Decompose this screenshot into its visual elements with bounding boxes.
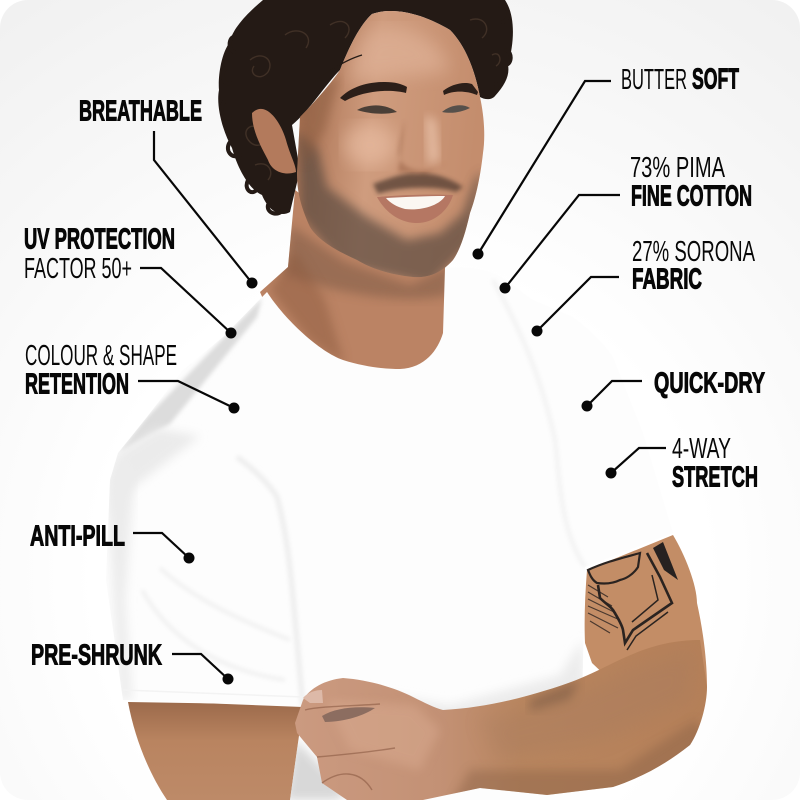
label: sorona fabric (532, 236, 755, 336)
label: uv protection (24, 224, 236, 338)
cheek highlight (344, 123, 396, 167)
marker dot (184, 552, 194, 564)
text: 4-way: 4-WAY (672, 433, 731, 465)
right armhole seam (493, 280, 585, 567)
tattoo: black triangle (653, 542, 678, 580)
hair curls (222, 6, 511, 214)
label: quick-dry (582, 368, 765, 412)
marker dot (228, 402, 240, 414)
marker dot (500, 282, 510, 294)
hair mass (218, 0, 513, 214)
neck shading (270, 225, 450, 365)
beard shape (298, 130, 483, 285)
shirt shading (106, 280, 585, 800)
right upper arm (585, 535, 707, 745)
label: pima fine cotton (500, 152, 752, 294)
label: anti-pill (30, 520, 194, 564)
tattoo: hatching (588, 585, 620, 633)
marker dot (582, 400, 592, 412)
text: anti-pill: ANTI-PILL (30, 520, 125, 552)
label: butter soft (472, 64, 739, 260)
sleeve left edge shade (108, 468, 132, 698)
temple shadow (299, 76, 340, 146)
tattoo (588, 542, 678, 650)
sleeve folds (166, 622, 170, 627)
leader line (172, 654, 228, 679)
text: soft: SOFT (692, 64, 739, 96)
face modelling (297, 27, 483, 285)
left eye (357, 105, 397, 114)
tattoo: cup outline (588, 553, 640, 584)
leader line (611, 448, 666, 473)
face (297, 11, 484, 277)
leader line (505, 195, 620, 288)
tattoo: leaf outline (598, 553, 672, 643)
marker dot (222, 674, 234, 684)
label: pre-shrunk (31, 640, 234, 684)
t-shirt (106, 267, 673, 800)
mouth (377, 195, 453, 223)
ear (252, 109, 296, 174)
marker dot (532, 326, 542, 336)
hair highlights (246, 19, 500, 180)
marker dot (606, 468, 616, 478)
nose shadow (397, 132, 432, 174)
eyebrows (340, 82, 478, 101)
lower shirt shadow under hand (290, 742, 344, 800)
left arm below sleeve (128, 702, 307, 800)
sleeve cap shade (121, 430, 193, 484)
forearm and hand (295, 640, 707, 800)
text: uv protection: UV PROTECTION (24, 224, 175, 256)
text: pre-shrunk: PRE-SHRUNK (31, 640, 162, 672)
right eye (442, 105, 470, 113)
forehead highlight (350, 27, 450, 85)
text: factor 50+: FACTOR 50+ (24, 253, 132, 285)
tattoo: second line (627, 575, 668, 650)
text: fabric: FABRIC (632, 264, 702, 296)
marker dot (246, 278, 258, 288)
teeth (386, 196, 445, 209)
label: colour and shape retention (25, 340, 240, 414)
leader line (133, 533, 189, 558)
leader line (478, 81, 611, 254)
text: colour and shape: COLOUR & SHAPE (25, 340, 177, 372)
sleeve seam shadow (237, 457, 303, 707)
lower shirt shadow above arm (420, 650, 583, 710)
nose highlight (425, 115, 440, 165)
text: 73% pima: 73% PIMA (630, 152, 725, 184)
text: butter: BUTTER (621, 64, 687, 96)
finger lines (305, 704, 395, 790)
shoulder grey band (118, 298, 262, 453)
photo: man in white t-shirt (106, 0, 715, 800)
leader line (537, 277, 619, 331)
sleeve hem (123, 690, 303, 697)
mustache (373, 174, 463, 194)
leader line (140, 268, 231, 333)
text: breathable: BREATHABLE (79, 96, 202, 128)
label: breathable (79, 96, 258, 288)
text: retention: RETENTION (25, 368, 129, 400)
hand pinch gap (322, 707, 375, 722)
neck (260, 190, 450, 385)
forehead hair strand (300, 55, 362, 95)
forearm shading (337, 680, 700, 795)
marker dot (472, 248, 484, 260)
marker dot (226, 328, 236, 338)
leader line (138, 381, 234, 408)
thumbnail (303, 690, 323, 703)
leader line (587, 381, 642, 406)
label: 4-way stretch (606, 433, 758, 494)
leader line (154, 131, 252, 283)
